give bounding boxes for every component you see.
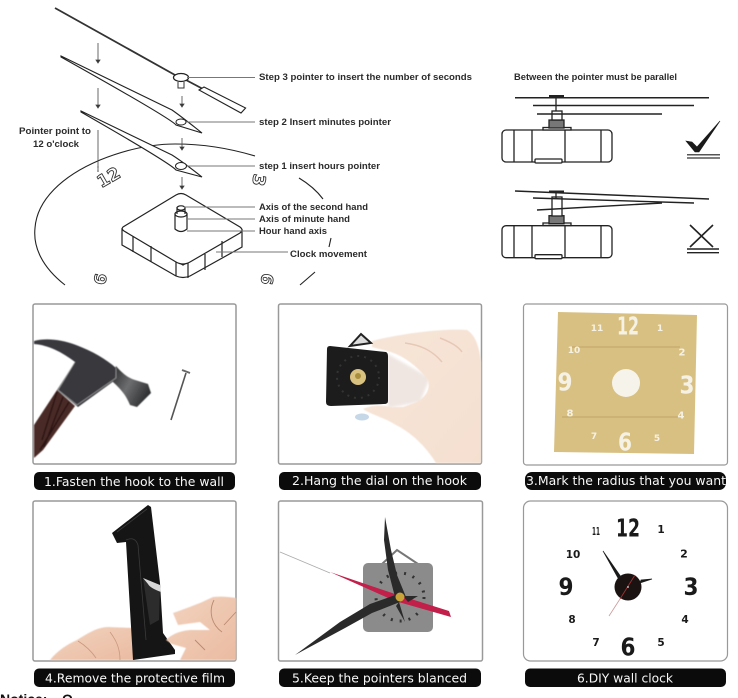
clock numerals: 6 (620, 632, 636, 662)
dial numerals: 9 (90, 272, 110, 286)
black minute hand (295, 594, 400, 655)
stencil numerals: 7 (591, 432, 597, 442)
brass hub (396, 592, 404, 602)
stencil numerals: 11 (591, 324, 603, 334)
clock numerals: 1 (657, 524, 665, 536)
assembly callout labels: Axis of minute hand (259, 214, 350, 225)
template centre hole (612, 369, 640, 397)
clock numerals: 2 (680, 548, 688, 560)
stencil numerals: 9 (558, 368, 572, 396)
clock numerals (558, 514, 698, 662)
stencil numerals: 2 (679, 348, 686, 358)
assembly callout labels: step 1 insert hours pointer (259, 161, 380, 172)
movement with hook (363, 550, 433, 632)
wrong: non-parallel pointers (502, 191, 709, 259)
tan template sheet (554, 312, 697, 454)
stencil numerals: 8 (567, 408, 574, 420)
clock numerals: 5 (657, 637, 665, 649)
stencil numerals: 12 (617, 312, 639, 340)
clock movement held (326, 334, 388, 406)
left hand (50, 627, 136, 660)
cropped notice text (0, 691, 73, 698)
stencil numerals: 5 (654, 434, 660, 444)
icon: cross mark (687, 225, 719, 253)
label: step 2 (279, 472, 481, 490)
label: step 6 (525, 668, 726, 687)
stencil numerals: 3 (680, 370, 694, 400)
assembly callout labels: Pointer point to (19, 126, 91, 137)
assembly callout labels: Clock movement (290, 249, 368, 260)
assembly callout labels: step 2 Insert minutes pointer (259, 117, 391, 128)
dial numerals: 12 (94, 163, 124, 193)
stencil numerals: 6 (618, 428, 632, 456)
assembly arrows (96, 43, 184, 189)
stencil numerals: 4 (678, 410, 685, 422)
stencil numerals: 1 (657, 324, 663, 334)
clock numerals: 9 (558, 573, 574, 601)
pointer tails (396, 596, 418, 622)
clock centre and hands (603, 551, 652, 616)
clock movement box (122, 194, 242, 278)
icon: check mark (686, 121, 720, 158)
right hand (166, 597, 236, 660)
panel: step 2 hang dial (278, 304, 482, 464)
panel: step 3 mark radius (524, 304, 728, 465)
stencil numerals (558, 312, 694, 456)
second hand pointer (55, 8, 246, 113)
assembly diagram (19, 8, 472, 286)
red second hand (280, 552, 451, 617)
black hour hand (384, 517, 406, 597)
label: step 1 (34, 472, 235, 490)
parallel heading: Between the pointer must be parallel (514, 72, 677, 82)
dial outline arcs (35, 144, 331, 285)
assembly callout labels (19, 72, 472, 260)
clock numerals: 4 (681, 614, 689, 626)
nail illustration (171, 370, 190, 420)
assembly callout labels: Axis of the second hand (259, 202, 368, 213)
minute hand pointer (61, 56, 202, 133)
clock numerals: 8 (568, 614, 576, 626)
label: step 2: 2.Hang the dial on the hook (292, 474, 467, 488)
correct: parallel pointers (502, 96, 709, 163)
clock numerals: 12 (616, 514, 640, 542)
thumb nail (355, 414, 369, 420)
dial numerals: 6 (257, 272, 277, 286)
label: step 3: 3.Mark the radius that you want (526, 474, 726, 488)
dial numerals (90, 163, 277, 286)
assembly callout labels: 12 o'clock (33, 139, 80, 150)
label: step 1: 1.Fasten the hook to the wall (44, 475, 224, 489)
panel: step 6 finished clock (524, 501, 728, 662)
leader lines (184, 78, 288, 252)
protective film (143, 578, 161, 592)
clock numerals: 7 (592, 637, 600, 649)
dial numerals: 3 (247, 172, 269, 188)
label: step 6: 6.DIY wall clock (577, 672, 673, 686)
panel: step 4 remove film (33, 501, 236, 661)
assembly callout labels: Step 3 pointer to insert the number of seconds (259, 72, 472, 83)
label: step 4: 4.Remove the protective film (45, 672, 225, 686)
stencil numerals: 10 (568, 346, 580, 356)
clock numerals: 11 (592, 526, 600, 538)
panel: step 5 balanced pointers (278, 501, 482, 661)
black numeral one (112, 505, 175, 660)
assembly callout labels: Hour hand axis (259, 226, 327, 237)
hand holding movement (355, 330, 481, 463)
hour hand pointer (81, 111, 202, 177)
hammer illustration (34, 339, 151, 458)
parallel pointer diagram (502, 72, 720, 259)
fold lines (562, 347, 684, 417)
label: step 5 (279, 668, 481, 687)
label: step 5: 5.Keep the pointers blanced (292, 672, 467, 686)
label: step 4 (34, 668, 235, 687)
clock numerals: 3 (684, 573, 698, 601)
clock numerals: 10 (566, 549, 580, 561)
panel: step 1 fasten hook (33, 304, 236, 464)
